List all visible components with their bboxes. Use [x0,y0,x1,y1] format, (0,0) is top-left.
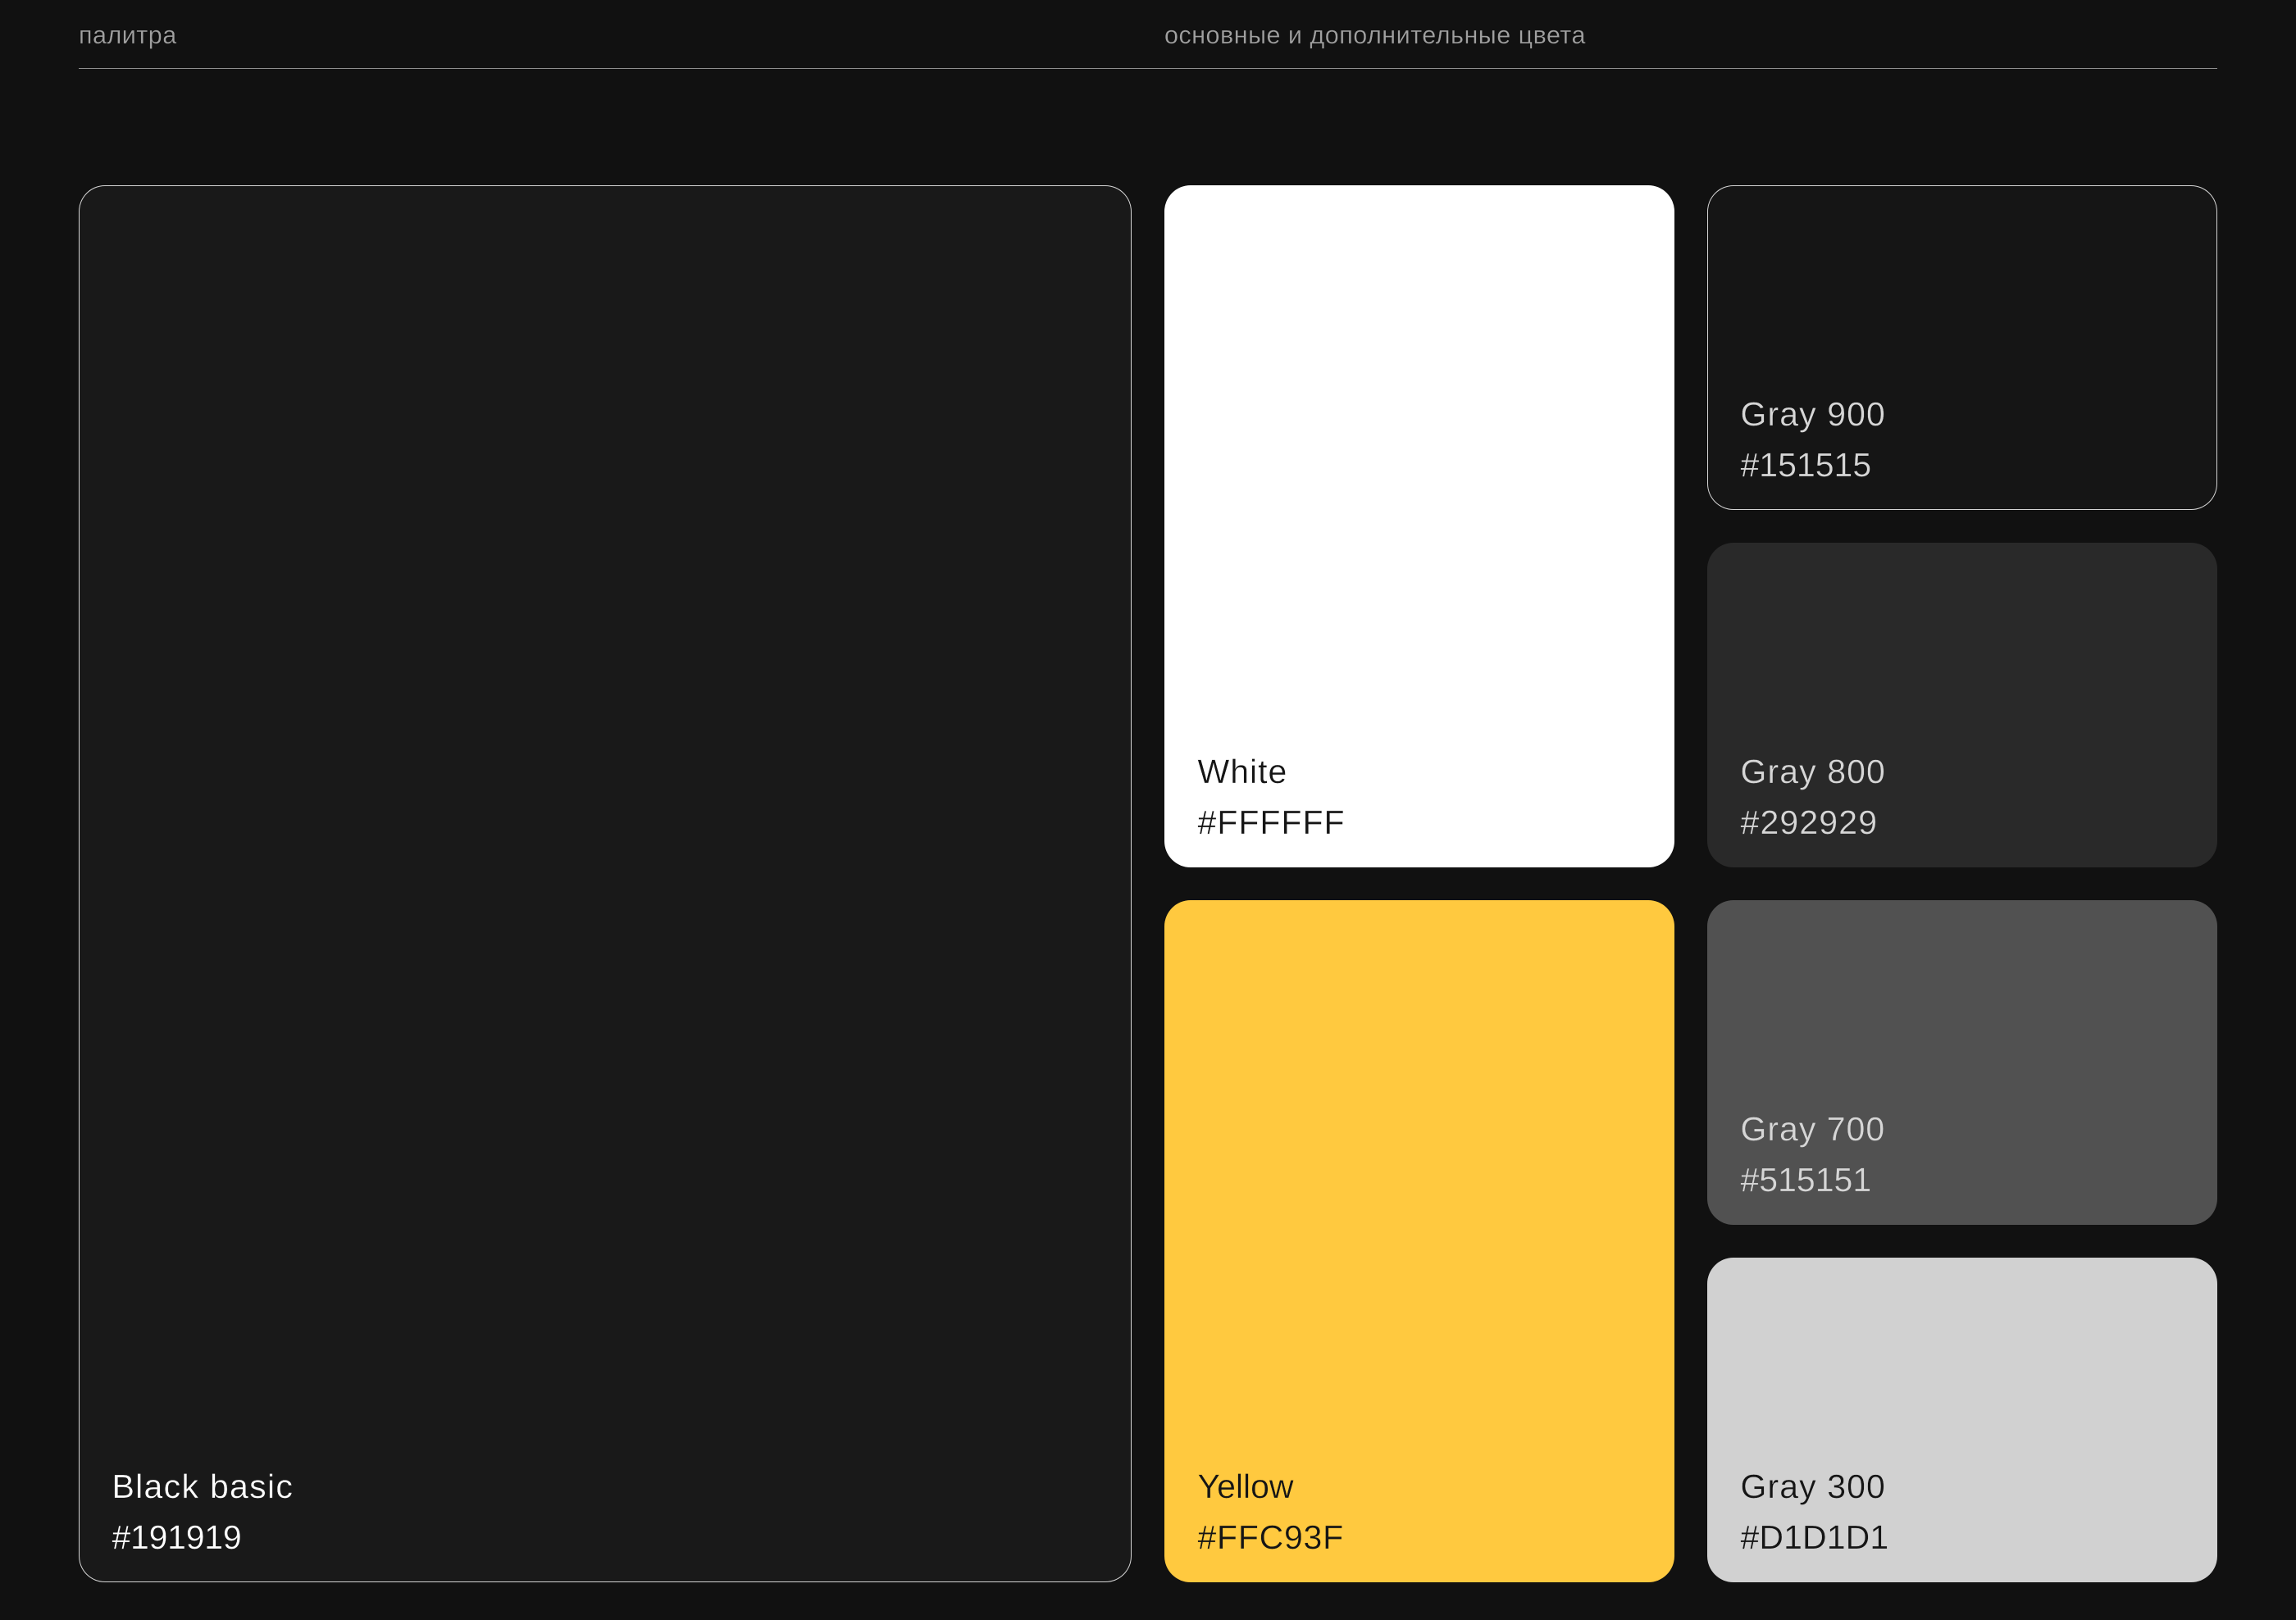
header label: палитра: палитра [79,21,177,49]
swatch label: Gray 300: Gray 300 [1740,1468,1886,1505]
swatch label: Gray 700: Gray 700 [1740,1110,1885,1148]
swatch label: Black basic [112,1468,294,1556]
swatch label: Yellow: #FFC93F [1197,1518,1344,1556]
swatch label: Yellow: Yellow [1197,1468,1294,1505]
swatch label: Gray 900: #151515 [1740,446,1871,484]
panel: White swatch [1164,185,1674,867]
swatch label: Yellow [1197,1468,1344,1556]
swatch label: Black basic: Black basic [112,1468,294,1505]
swatch label: Gray 800: #292929 [1740,803,1878,841]
panel: Gray 700 swatch [1707,900,2217,1225]
header label: основные и дополнительные цвета: основные и дополнительные цвета [1164,21,1586,49]
swatch label: Gray 700 [1740,1110,1885,1199]
swatch label: White [1197,753,1346,841]
swatch label: Gray 800 [1740,753,1886,841]
swatch label: Gray 800: Gray 800 [1740,753,1886,790]
swatch label: Gray 300: #D1D1D1 [1740,1518,1888,1556]
swatch label: Gray 300 [1740,1468,1888,1556]
swatch label: Gray 900: Gray 900 [1740,395,1886,433]
panel: Gray 300 swatch [1707,1258,2217,1582]
swatch label: White: #FFFFFF [1197,803,1346,841]
panel: Yellow swatch [1164,900,1674,1582]
swatch label: Gray 900 [1740,395,1886,484]
swatch label: White: White [1197,753,1287,790]
swatch label: Gray 700: #515151 [1740,1161,1871,1199]
panel: Black basic swatch [79,185,1132,1582]
panel: Gray 800 swatch [1707,543,2217,867]
swatch label: Black basic: #191919 [112,1518,241,1556]
panel: Gray 900 swatch [1707,185,2217,510]
